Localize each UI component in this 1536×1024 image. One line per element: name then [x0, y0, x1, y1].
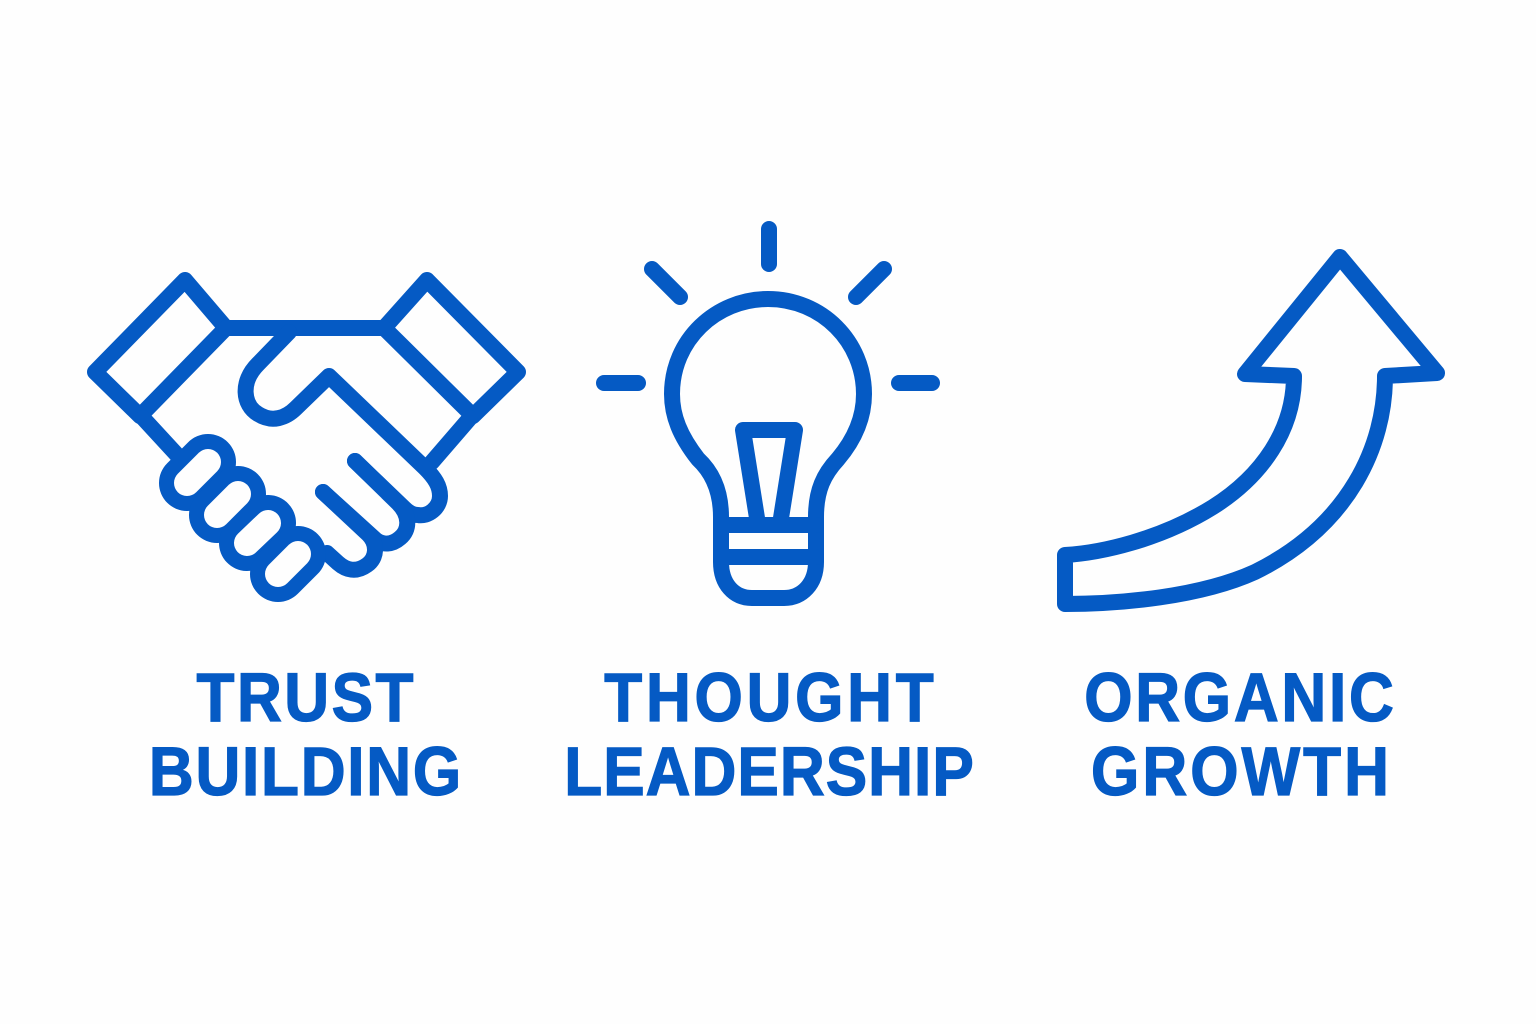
- icon: growth arrow: [1065, 257, 1437, 604]
- icon: light bulb: [604, 229, 932, 598]
- label: thought leadership: THOUGHT: [604, 659, 934, 736]
- label: organic growth: GROWTH: [1091, 733, 1389, 810]
- label: organic growth: [1084, 659, 1394, 810]
- label: thought leadership: [564, 659, 974, 810]
- label: organic growth: ORGANIC: [1084, 659, 1394, 736]
- label: trust building: TRUST: [197, 659, 413, 736]
- label: thought leadership: LEADERSHIP: [564, 733, 974, 810]
- label: trust building: BUILDING: [149, 733, 461, 810]
- label: trust building: [149, 659, 461, 810]
- icon: handshake: [95, 280, 518, 574]
